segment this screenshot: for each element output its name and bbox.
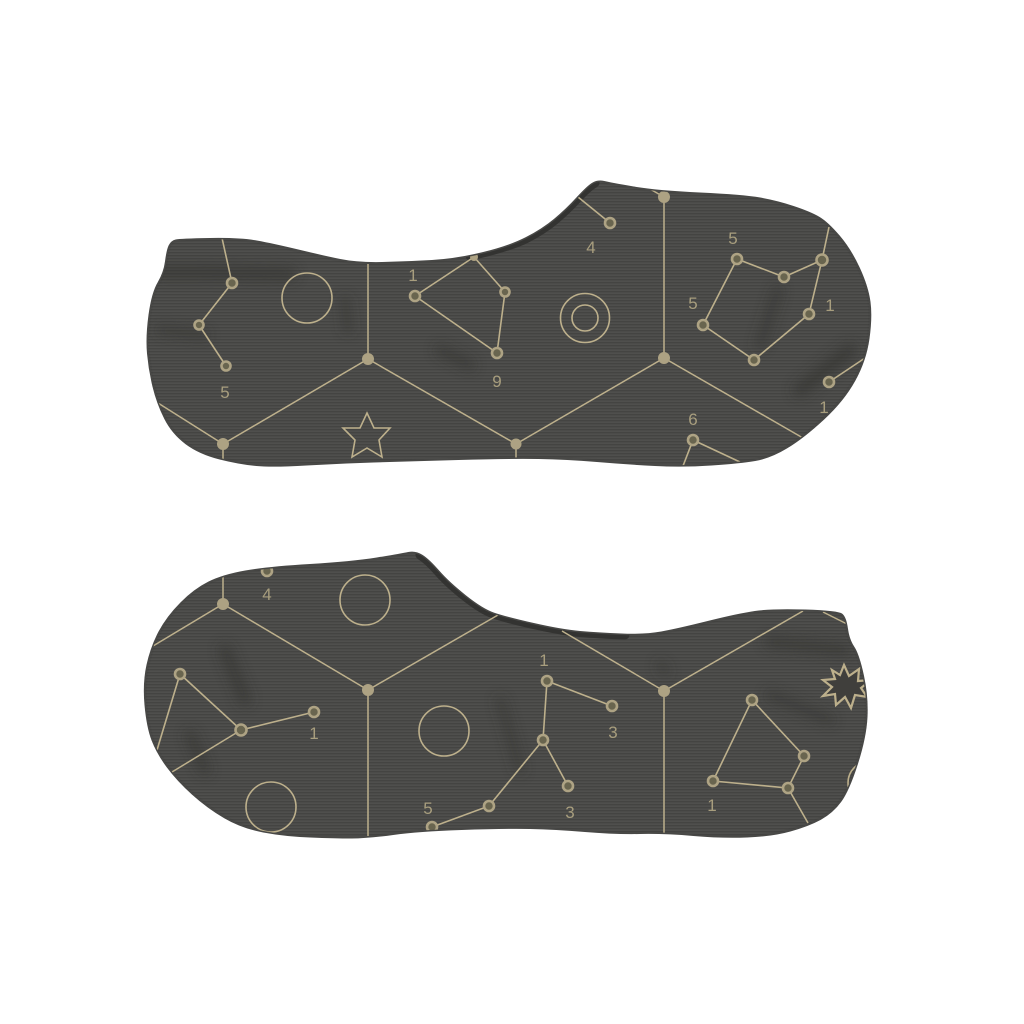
numbers: 1: [825, 296, 835, 315]
heel edge shadow: [470, 183, 595, 256]
circle planets: [246, 575, 892, 832]
numbers: 4: [586, 238, 596, 257]
numbers: 1: [707, 796, 717, 815]
burst star: [823, 665, 871, 708]
star: [343, 413, 390, 457]
numbers: 1: [309, 724, 319, 743]
numbers: 5: [423, 799, 433, 818]
top sock: [140, 170, 880, 470]
hexagon lines: [153, 577, 847, 836]
numbers: 6: [688, 410, 698, 429]
hexagon nodes: [217, 598, 670, 697]
fabric folds: [160, 272, 850, 390]
constellation: bottom: [683, 435, 740, 466]
constellation pattern: [154, 554, 866, 836]
bottom sock: [135, 545, 892, 845]
numbers: 9: [492, 372, 502, 391]
constellation: left: [194, 238, 237, 370]
numbers: [262, 585, 717, 822]
numbers: 3: [565, 803, 575, 822]
numbers: 1: [539, 651, 549, 670]
constellation: left: [157, 669, 319, 750]
numbers: 1: [408, 266, 418, 285]
ring planet: [560, 294, 610, 342]
fabric folds: [190, 642, 845, 770]
constellation: toe: [824, 358, 865, 387]
heel edge shadow: [420, 555, 625, 635]
constellation pattern: [140, 170, 880, 470]
hexagon lines: [158, 189, 803, 470]
numbers: [220, 229, 835, 429]
circle planet: [282, 273, 332, 323]
numbers: 4: [262, 585, 272, 604]
constellation: middle: [427, 676, 617, 832]
constellation: top node: [262, 566, 272, 576]
numbers: 5: [220, 383, 230, 402]
constellation: right: [698, 227, 829, 365]
numbers: 5: [688, 294, 698, 313]
constellation: middle: [410, 253, 510, 358]
constellation: heel: [578, 197, 615, 228]
numbers: 3: [608, 723, 618, 742]
socks illustration: [144, 180, 872, 838]
sock body: [145, 553, 866, 837]
hexagon nodes: [217, 191, 670, 450]
numbers: 5: [728, 229, 738, 248]
constellation: right: [708, 695, 809, 823]
sock body: [148, 182, 870, 465]
numbers: 1: [819, 398, 829, 417]
